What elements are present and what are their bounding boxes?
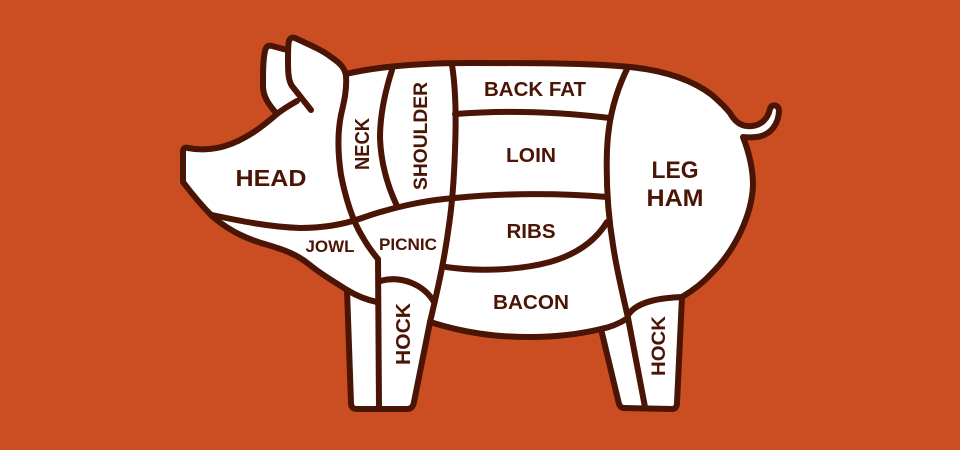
- label: front hock: HOCK: [392, 303, 415, 365]
- head and jowl line continuing to ribs top: [212, 194, 607, 228]
- label: leg ham: [646, 157, 704, 212]
- shoulder line: [380, 70, 397, 206]
- label: bacon: BACON: [493, 291, 569, 314]
- ham line: [607, 67, 645, 407]
- label: head: HEAD: [236, 165, 306, 191]
- label: leg ham: HAM: [646, 185, 704, 212]
- rear hock curve: [628, 297, 682, 315]
- pig outlines and cut lines: [183, 38, 779, 409]
- front ear outline with crease: [288, 38, 346, 110]
- back ear outline: [263, 46, 287, 114]
- label: loin: LOIN: [506, 144, 556, 167]
- tail fill: [730, 105, 779, 137]
- back ear fill: [263, 46, 300, 114]
- ribs curve: [446, 222, 607, 270]
- label: jowl: JOWL: [306, 237, 354, 256]
- head top outline: [183, 101, 430, 409]
- label: neck: NECK: [352, 117, 374, 170]
- back fat line: [455, 112, 610, 118]
- front ear and head fill: [288, 38, 346, 125]
- belly outline: [430, 318, 628, 337]
- jowl lower divide: [347, 290, 377, 302]
- label: back fat: BACK FAT: [484, 78, 586, 101]
- spine divide to front leg: [430, 65, 456, 322]
- label: leg ham: LEG: [652, 157, 698, 184]
- white fills of the pig: [183, 38, 779, 409]
- body fill: [183, 63, 753, 409]
- label: picnic: PICNIC: [379, 235, 437, 254]
- neck line and front leg divide: [338, 76, 379, 408]
- label: ribs: RIBS: [506, 220, 556, 243]
- label: shoulder: SHOULDER: [410, 82, 432, 190]
- back and ham outline with tail: [346, 63, 779, 409]
- front hock curve: [380, 279, 434, 302]
- label: rear hock: HOCK: [649, 316, 670, 376]
